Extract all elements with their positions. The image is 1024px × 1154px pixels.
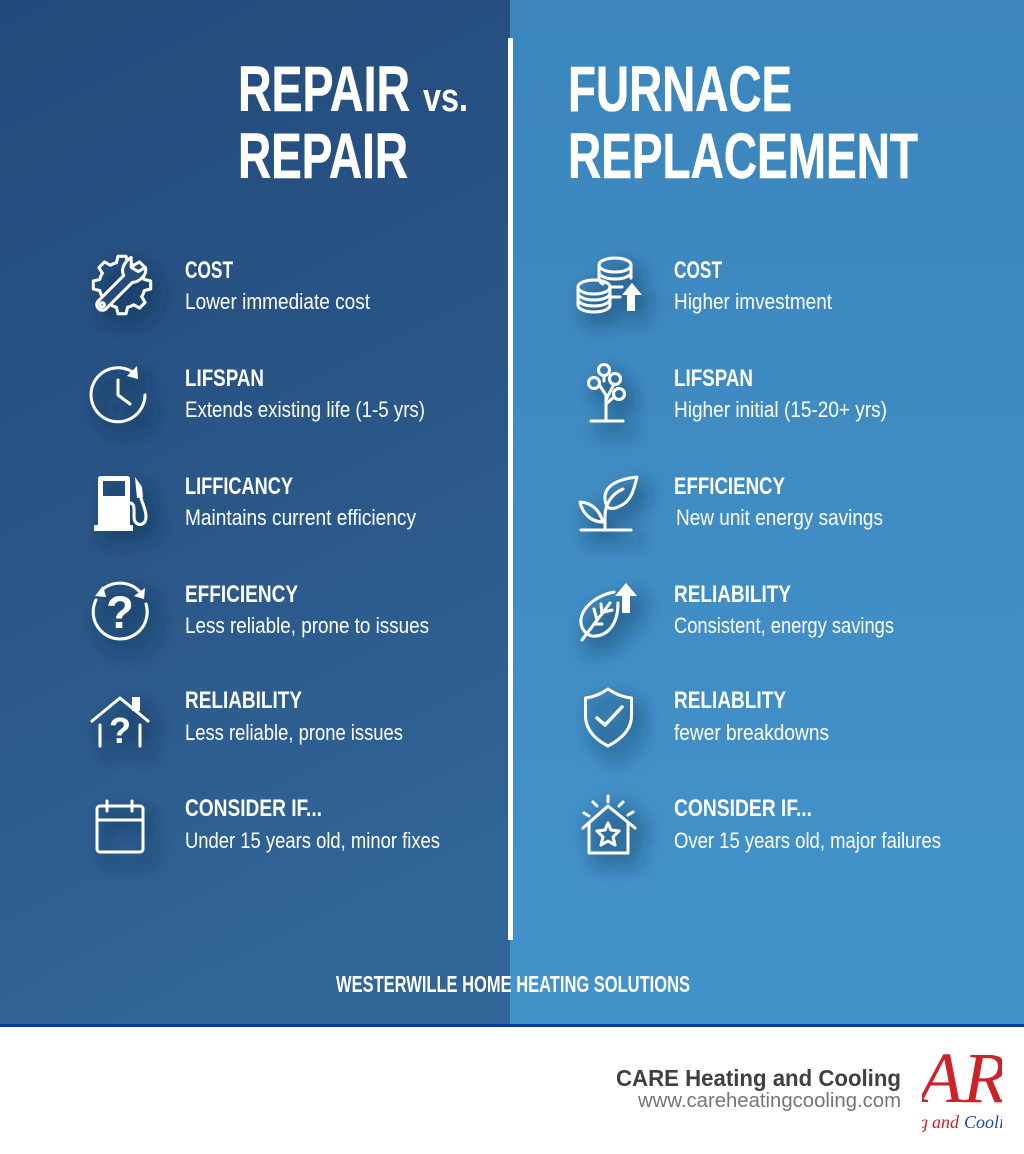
panel: replacement column — [578, 257, 941, 853]
icon: shield with check — [586, 689, 632, 746]
logo: cropped care mark: AR — [915, 1038, 1007, 1118]
title: furnace replacement — [568, 53, 918, 192]
text: cost — [185, 257, 370, 314]
company name: CARE Heating and Cooling — [616, 1065, 901, 1091]
text: cost: Higher imvestment — [674, 289, 832, 314]
text: cost: COST — [674, 257, 722, 284]
icon: house with question mark — [92, 697, 148, 751]
icon: house with question mark: ? — [109, 710, 131, 751]
icon: sprout — [580, 477, 637, 530]
text: consider if: Under 15 years old, minor fixes — [185, 828, 440, 853]
website: www.careheatingcooling.com — [637, 1090, 901, 1112]
text: consider if: CONSIDER IF... — [674, 795, 812, 822]
icon: question mark in cycle: ? — [106, 587, 134, 638]
logo: cropped care mark: Cooling — [964, 1112, 1022, 1132]
icon: calendar — [97, 801, 143, 852]
text: lifespan — [185, 365, 425, 422]
panel: replacement background — [510, 0, 1024, 1024]
title: furnace replacement: FURNACE — [568, 53, 792, 125]
title: repair vs. repair: REPAIR — [238, 120, 408, 192]
text: reliablity: fewer breakdowns — [674, 720, 829, 745]
text: efficiency: EFFICIENCY — [185, 581, 298, 608]
title: repair vs. repair — [238, 53, 468, 192]
text: efficiency — [674, 473, 883, 530]
text: lifficancy: Maintains current efficiency — [185, 505, 416, 530]
text: cost: Lower immediate cost — [185, 289, 370, 314]
caption: westerville home heating solutions: WESTERWILLE HOME HEATING SOLUTIONS — [336, 971, 690, 997]
text: lifespan: Higher initial (15-20+ yrs) — [674, 397, 887, 422]
text: efficiency: Less reliable, prone to issues — [185, 613, 429, 638]
icon: wrench and gear — [89, 255, 151, 315]
logo: cropped care mark — [922, 1054, 1002, 1132]
logo: cropped care mark: and — [932, 1112, 960, 1132]
title: repair vs. repair: REPAIR — [238, 53, 410, 125]
footer — [0, 1024, 1024, 1132]
text: efficiency: New unit energy savings — [676, 505, 883, 530]
text: efficiency: EFFICIENCY — [674, 473, 785, 500]
text: reliability: RELIABILITY — [185, 687, 302, 714]
text: reliability — [674, 581, 894, 638]
center divider — [508, 38, 513, 940]
text: cost: COST — [185, 257, 233, 284]
text: consider if — [185, 795, 440, 853]
text: lifespan: Extends existing life (1-5 yrs) — [185, 397, 425, 422]
text: consider if: Over 15 years old, major failures — [674, 828, 941, 853]
icon: fuel pump — [94, 476, 146, 531]
text: reliablity — [674, 687, 829, 745]
text: reliability — [185, 687, 403, 745]
panel: repair background — [0, 0, 510, 1024]
text: cost — [674, 257, 832, 314]
text: efficiency — [185, 581, 429, 638]
text: lifespan: LIFSPAN — [185, 365, 264, 392]
icon: clock with arrow — [91, 366, 145, 422]
text: consider if — [674, 795, 941, 853]
text: reliability: Consistent, energy savings — [674, 613, 894, 638]
text: lifficancy — [185, 473, 416, 530]
panel: repair column — [89, 255, 440, 853]
logo: cropped care mark: g — [919, 1112, 928, 1132]
text: consider if: CONSIDER IF... — [185, 795, 322, 822]
icon: coins with up arrow — [578, 258, 642, 312]
text: lifficancy: LIFFICANCY — [185, 473, 293, 500]
icon: question mark in cycle — [93, 583, 147, 639]
text: reliability: Less reliable, prone issues — [185, 720, 403, 745]
icon: branching plant — [588, 364, 624, 421]
icon: house with star — [583, 796, 635, 853]
title: repair vs. repair: vs. — [423, 76, 468, 120]
icon: leaf with up arrow — [581, 583, 637, 640]
text: lifespan: LIFSPAN — [674, 365, 753, 392]
text: reliablity: RELIABLITY — [674, 687, 786, 714]
text: reliability: RELIABILITY — [674, 581, 791, 608]
text: lifespan — [674, 365, 887, 422]
